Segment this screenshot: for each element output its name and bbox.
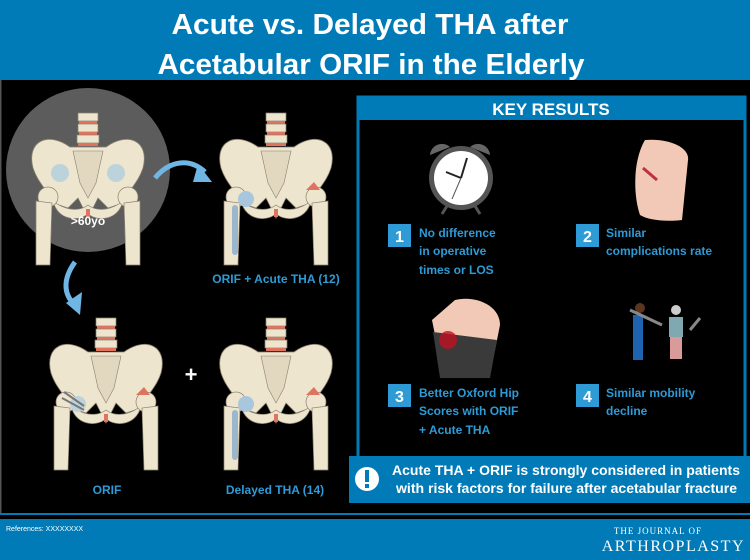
item 4: Similar mobility	[606, 386, 696, 400]
item 3: 3	[395, 389, 404, 406]
grey circle background	[6, 88, 170, 252]
item 3: Scores with ORIF	[419, 404, 518, 418]
item 1: times or LOS	[419, 263, 494, 277]
item 3	[388, 384, 519, 437]
title: Acetabular ORIF in the Elderly	[158, 49, 584, 81]
callout: conclusion: with risk factors for failure after acetabular fracture	[395, 480, 737, 496]
pelvis: patient over 60	[32, 113, 144, 265]
arrow: to acute THA	[155, 163, 212, 182]
label: ORIF + Acute THA: ORIF + Acute THA (12)	[212, 272, 340, 286]
journal logo: THE JOURNAL OF	[614, 526, 702, 536]
footer band	[0, 513, 750, 560]
item 1: in operative	[419, 244, 487, 258]
references: References: XXXXXXXX	[6, 526, 83, 533]
key results heading: KEY RESULTS	[492, 100, 610, 119]
item 3: Better Oxford Hip	[419, 386, 519, 400]
pelvis: ORIF	[50, 318, 162, 470]
item 4	[576, 384, 696, 418]
icon: exclamation	[355, 467, 379, 491]
icon: hip pain	[432, 299, 500, 378]
item 4: 4	[583, 389, 592, 406]
callout: conclusion	[349, 456, 750, 503]
title	[158, 9, 584, 81]
item 2: complications rate	[606, 244, 712, 258]
item 1: No difference	[419, 226, 496, 240]
journal logo	[602, 526, 745, 555]
callout: conclusion: Acute THA + ORIF is strongly considered in patients	[392, 462, 740, 478]
pelvis: delayed THA	[220, 318, 332, 470]
header band	[0, 0, 750, 80]
plus sign: +	[185, 362, 197, 387]
label: Delayed THA: Delayed THA (14)	[226, 483, 324, 497]
left frame line	[0, 80, 2, 513]
age label: >60yo	[71, 214, 105, 228]
icon: hip wound	[635, 140, 688, 221]
journal logo: ARTHROPLASTY	[602, 538, 745, 555]
item 1: 1	[395, 229, 404, 246]
panel: key results	[357, 96, 746, 462]
title: Acute vs. Delayed THA after	[172, 9, 568, 41]
item 3: + Acute THA	[419, 423, 491, 437]
item 2: Similar	[606, 226, 646, 240]
icon: mobility rehab	[630, 303, 700, 360]
item 2	[576, 224, 712, 258]
label: ORIF: ORIF	[93, 483, 121, 497]
icon: alarm clock	[429, 144, 493, 214]
pelvis: ORIF + acute THA	[220, 113, 332, 265]
item 2: 2	[583, 229, 592, 246]
item 1	[388, 224, 496, 277]
item 4: decline	[606, 404, 648, 418]
arrow: to ORIF	[66, 262, 82, 315]
